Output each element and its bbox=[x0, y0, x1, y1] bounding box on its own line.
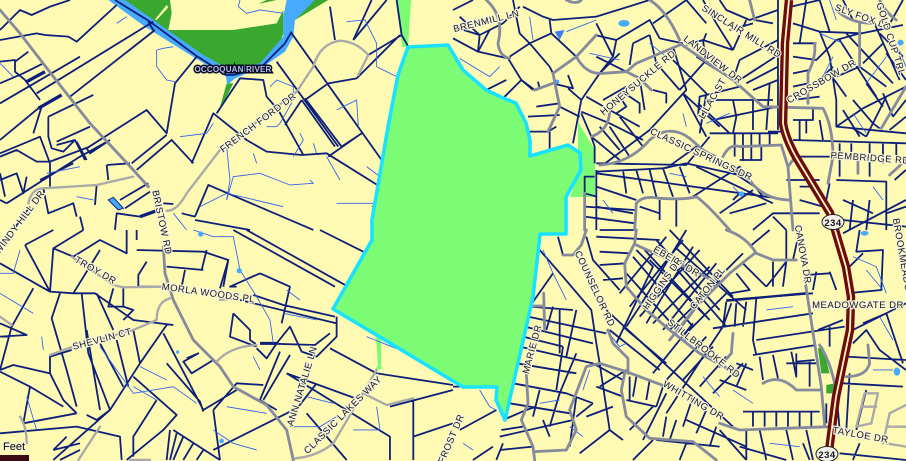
route shield 234 south: 234 bbox=[818, 450, 836, 461]
label: Bristow Rd: BRISTOW RD bbox=[149, 189, 174, 256]
label: French Ford Dr: FRENCH FORD DR bbox=[218, 91, 299, 155]
streams south-west bbox=[0, 230, 400, 450]
route shield 234 north bbox=[822, 214, 844, 230]
river label: OCCOQUAN RIVER bbox=[194, 65, 272, 74]
label: Ebert Dr: EBERT DR bbox=[651, 244, 701, 280]
highway 234 bbox=[783, 0, 851, 461]
streams north-west bbox=[0, 0, 398, 230]
highlighted parcel bbox=[333, 45, 581, 420]
route shield 234 north: 234 bbox=[824, 218, 842, 229]
label: Honeysuckle Rd: HONEYSUCKLE RD bbox=[598, 48, 678, 118]
parcel lines south-east bbox=[453, 230, 906, 460]
label: Classic Springs Dr: CLASSIC SPRINGS DR bbox=[648, 126, 754, 183]
label: Morla Woods Pl: MORLA WOODS PL bbox=[161, 282, 256, 306]
scale label: Feet bbox=[3, 441, 25, 453]
parcel lines north-east bbox=[453, 0, 906, 233]
river and wetland bbox=[108, 0, 328, 113]
label: Landview Dr: LANDVIEW DR bbox=[681, 34, 744, 86]
label: Caton Pl: CATON PL bbox=[688, 265, 728, 312]
label: Counselor Rd: COUNSELOR RD bbox=[572, 249, 617, 329]
streams south-east bbox=[463, 231, 900, 450]
label: Troy Dr: TROY DR bbox=[73, 255, 118, 287]
label: Ann Natalie Ln: ANN NATALIE LN bbox=[285, 345, 320, 427]
gray roads north-west bbox=[0, 10, 368, 211]
label: Sly Fox Ln: SLY FOX LN bbox=[833, 2, 892, 33]
label: Lilac St: LILAC ST bbox=[697, 76, 729, 121]
label: Canova Dr: CANOVA DR bbox=[792, 224, 813, 285]
label: Classic Lakes Way: CLASSIC LAKES WAY bbox=[302, 374, 385, 456]
route shield 234 south bbox=[816, 446, 838, 461]
label: Tayloe Dr: TAYLOE DR bbox=[831, 425, 889, 446]
label: Marie Dr: MARIE DR bbox=[521, 324, 544, 375]
parcel lines south-west bbox=[0, 230, 453, 460]
parcel outside highlighted area pale green bbox=[375, 0, 595, 370]
label: Shevlin Ct: SHEVLIN CT bbox=[71, 326, 133, 353]
gray roads south-west bbox=[0, 247, 413, 460]
label: Stillbrooke Rd: STILLBROOKE RD bbox=[665, 317, 742, 381]
label: Meadowgate Dr: MEADOWGATE DR bbox=[812, 300, 904, 311]
streams and ponds north-east bbox=[460, 0, 906, 213]
label: Crossbow Dr: CROSSBOW DR bbox=[785, 57, 858, 106]
gray roads north-east bbox=[486, 0, 906, 230]
label: Sinclair Mill Rd: SINCLAIR MILL RD bbox=[700, 3, 783, 61]
label: Higgins Dr: HIGGINS DR bbox=[641, 255, 685, 312]
scale bar block bbox=[0, 455, 29, 461]
park parcels bbox=[818, 347, 835, 393]
gray roads south-east bbox=[521, 230, 906, 460]
scale bar bbox=[0, 441, 29, 461]
label: Whitting Dr: WHITTING DR bbox=[661, 379, 726, 423]
label: Brenmill Ln: BRENMILL LN bbox=[452, 8, 520, 35]
parcel lines north-west bbox=[0, 0, 408, 230]
